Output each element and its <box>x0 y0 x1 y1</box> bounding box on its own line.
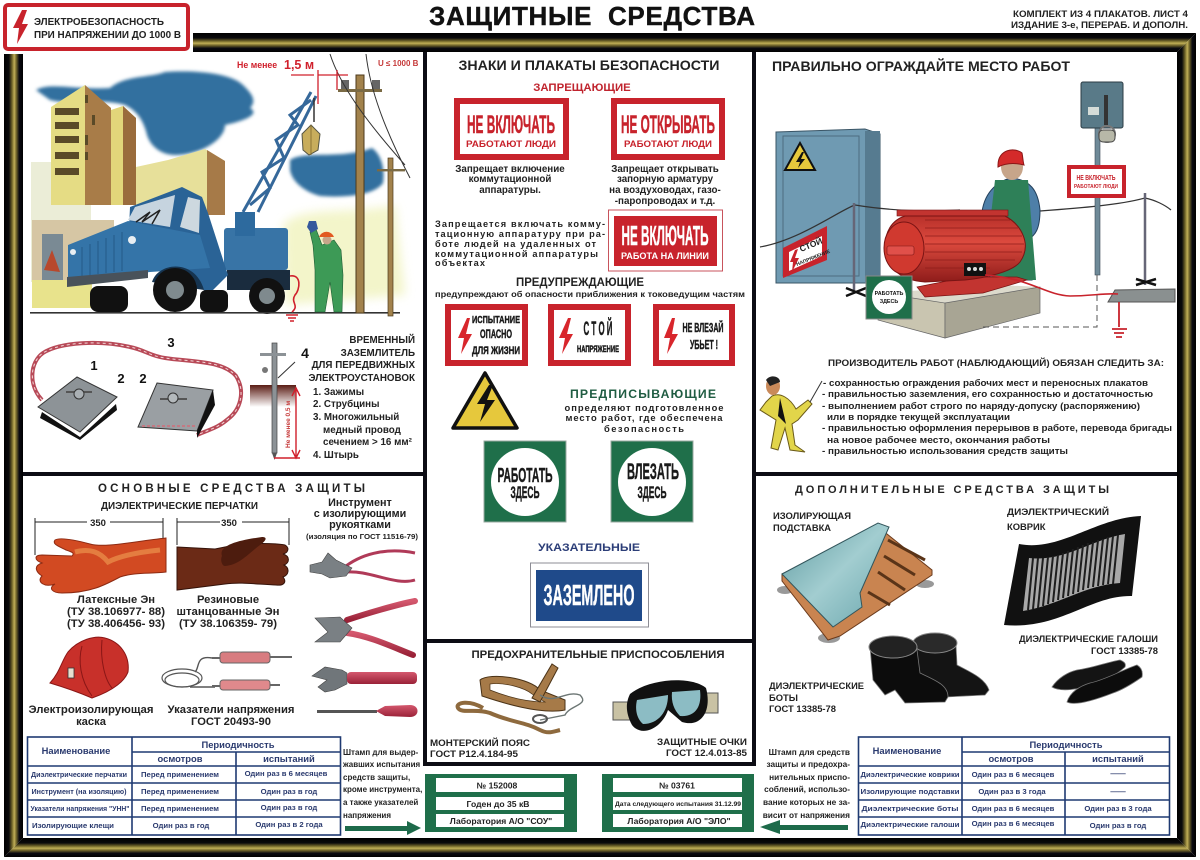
table: main equipment inspection periods: Один раз в год <box>261 787 317 796</box>
sign: stop, voltage on rope: СТОЙ <box>798 235 824 254</box>
note: stamp for tested equipment: жавших испытания <box>342 760 421 769</box>
text: remote site caption: боте людей на удаленных от <box>435 239 596 249</box>
note: stamp for tested equipment: а также указателей <box>343 798 418 807</box>
note: stamp for tested equipment: кроме инструмента, <box>343 785 422 794</box>
table: additional equipment inspection periods: Изолирующие подставки <box>860 787 960 796</box>
illustration: power poles <box>330 54 410 316</box>
caption: voltage indicators <box>168 704 294 728</box>
table: main equipment inspection periods: Один раз в 6 месяцев <box>245 769 328 778</box>
captions: gloves: штанцованные Эн <box>176 606 280 618</box>
list: supervisor duties <box>822 377 1172 456</box>
label: dielectric boots <box>769 680 864 714</box>
note: stamp for voltage independent equipment: соблений, использо- <box>764 784 850 794</box>
captions: gloves: (ТУ 38.106977- 88) <box>67 606 165 618</box>
note: stamp for voltage independent equipment: вание которых не за- <box>763 797 850 807</box>
stamp: green test label 03761: Лаборатория А/О "ЭЛО" <box>627 816 731 826</box>
dimension: minimum distance <box>237 58 419 104</box>
dimension: minimum distance: 1,5 м <box>284 58 314 72</box>
captions: gloves <box>67 594 280 630</box>
sign: test, danger to life: ОПАСНО <box>480 329 512 341</box>
table: additional equipment inspection periods: Один раз в 3 года <box>1084 804 1152 813</box>
illustration: dielectric overshoes <box>1052 660 1142 703</box>
sign: do not switch on, on post: РАБОТАЮТ ЛЮДИ <box>1074 184 1118 190</box>
list: supervisor duties: или в порядке текущей эксплуатации <box>827 411 1010 422</box>
text: do not switch on caption: Запрещает включение <box>455 164 565 175</box>
label: dielectric boots: БОТЫ <box>769 692 798 703</box>
label: dielectric mat: ДИЭЛЕКТРИЧЕСКИЙ <box>1007 506 1109 517</box>
text: do not open caption <box>609 164 721 207</box>
panel: safety signs <box>435 57 745 627</box>
note: stamp for voltage independent equipment: висит от напряжения <box>763 810 850 820</box>
sign: earthed: ЗАЗЕМЛЕНО <box>544 580 634 612</box>
illustration: clouds <box>36 71 384 197</box>
heading: ПРЕДОХРАНИТЕЛЬНЫЕ ПРИСПОСОБЛЕНИЯ <box>472 649 724 661</box>
sign: do not climb: НЕ ВЛЕЗАЙ <box>682 320 724 335</box>
table: additional equipment inspection periods: —— <box>1110 769 1126 778</box>
sign: stop, voltage: НАПРЯЖЕНИЕ <box>577 344 619 354</box>
list: supervisor duties: - сохранностью ограждения рабочих мест и переносных плакатов <box>823 377 1148 388</box>
label: dielectric mat <box>1007 506 1109 532</box>
text: temporary earthing device: ДЛЯ ПЕРЕДВИЖНЫХ <box>312 360 415 371</box>
panel: main protective equipment <box>27 483 422 835</box>
text: temporary earthing device: 2. Струбцины <box>313 399 379 410</box>
table: main equipment inspection periods: Наименование <box>42 745 110 756</box>
label: dielectric boots: ДИЭЛЕКТРИЧЕСКИЕ <box>769 680 864 691</box>
sign: do not open: РАБОТАЮТ ЛЮДИ <box>624 139 712 149</box>
stamp: green test label 03761: Дата следующего испытания 31.12.99 <box>615 801 742 808</box>
text: temporary earthing device: ЭЛЕКТРОУСТАНОВОК <box>308 373 415 384</box>
stamp: green test label 152008: Годен до 35 кВ <box>467 799 529 809</box>
caption: lineman belt <box>430 737 530 759</box>
illustration: crane load <box>302 125 320 155</box>
captions: gloves: (ТУ 38.106359- 79) <box>179 618 277 630</box>
text: do not switch on caption: коммутационной <box>469 174 551 185</box>
panel: safety devices <box>430 649 747 759</box>
sign: do not switch on, line work <box>608 210 722 271</box>
text: do not switch on caption <box>455 164 565 196</box>
illustration: lineman belt <box>458 664 583 732</box>
arrow: to right stamp <box>760 820 848 834</box>
caption: hard hat: Электроизолирующая <box>28 704 154 716</box>
note: stamp for voltage independent equipment: защиты и предохра- <box>767 759 850 769</box>
table: additional equipment inspection periods: Диэлектрические коврики <box>860 770 960 779</box>
sign: do not switch on, on post: НЕ ВКЛЮЧАТЬ <box>1076 175 1116 182</box>
label: insulating stand: ИЗОЛИРУЮЩАЯ <box>773 510 851 521</box>
note: stamp for tested equipment: Штамп для выдер- <box>343 748 419 757</box>
text: remote site caption: объектах <box>435 258 486 268</box>
text: remote site caption <box>435 219 605 268</box>
stamp: green test label 03761 <box>602 774 754 832</box>
heading: insulated tools <box>306 497 418 541</box>
illustration: motor on foundation <box>878 210 1040 338</box>
note: stamp for tested equipment: средств защиты, <box>343 773 410 782</box>
illustration: safety goggles <box>613 680 718 731</box>
list: supervisor duties: - правильностью оформления перерывов в работе, перевода бригады <box>822 422 1172 433</box>
text: mandatory description: определяют подготовленное <box>564 402 724 413</box>
note: stamp for voltage independent equipment: Штамп для средств <box>769 747 850 757</box>
illustration: pliers and tools <box>310 551 418 717</box>
table: additional equipment inspection periods <box>858 737 1170 835</box>
sign: stop, voltage on rope: НАПРЯЖЕНИЕ <box>796 249 832 268</box>
heading: ПРАВИЛЬНО ОГРАЖДАЙТЕ МЕСТО РАБОТ <box>772 57 1070 74</box>
sign: do not switch on: РАБОТАЮТ ЛЮДИ <box>466 139 556 149</box>
note: stamp for tested equipment <box>342 748 422 820</box>
table: additional equipment inspection periods: Диэлектрические галоши <box>860 820 960 829</box>
edition note: ИЗДАНИЕ 3-е, ПЕРЕРАБ. И ДОПОЛН. <box>1011 20 1188 30</box>
illustration: switch box with padlock <box>1081 82 1123 275</box>
sign: stop, voltage: С Т О Й <box>584 318 612 340</box>
edition note: КОМПЛЕКТ ИЗ 4 ПЛАКАТОВ. ЛИСТ 4 <box>1013 9 1189 19</box>
list: supervisor duties: на новое рабочее место, окончания работы <box>827 434 1050 445</box>
sign: work here: РАБОТАТЬ <box>498 465 552 487</box>
illustration: portable earthing clamps: 1 <box>90 358 98 373</box>
note: stamp for voltage independent equipment <box>763 747 850 820</box>
text: temporary earthing device: сечением > 16 мм² <box>323 437 413 448</box>
heading: indicating: УКАЗАТЕЛЬНЫЕ <box>538 542 641 554</box>
illustration: city buildings <box>31 85 405 308</box>
text: mandatory description <box>564 402 724 434</box>
sign: do not climb <box>656 307 732 363</box>
illustration: rubber glove <box>177 537 288 590</box>
sign: do not switch on, line work: РАБОТА НА ЛИНИИ <box>621 251 709 261</box>
table: main equipment inspection periods: Диэлектрические перчатки <box>31 770 127 779</box>
caption: voltage indicators: ГОСТ 20493-90 <box>191 716 271 728</box>
panel: crane near power line <box>30 54 419 461</box>
sign: work here on motor <box>866 276 912 319</box>
heading: dielectric gloves: ДИЭЛЕКТРИЧЕСКИЕ ПЕРЧАТКИ <box>101 501 258 512</box>
panel dividers <box>23 52 1177 766</box>
list: supervisor duties: - правильностью использования средств защиты <box>822 445 1068 456</box>
table: main equipment inspection periods: Один раз в 2 года <box>255 820 323 829</box>
text: remote site caption: тационную аппаратуру при ра- <box>435 229 605 239</box>
text: remote site caption: Запрещается включать комму- <box>435 219 605 229</box>
table: additional equipment inspection periods: Один раз в 6 месяцев <box>972 819 1055 828</box>
text: remote site caption: коммутационной аппаратуры <box>435 249 598 259</box>
caption: safety goggles: ГОСТ 12.4.013-85 <box>666 747 747 758</box>
table: main equipment inspection periods: Перед применением <box>141 804 219 813</box>
table: main equipment inspection periods: Один раз в год <box>261 803 317 812</box>
table: main equipment inspection periods: Один раз в год <box>153 821 209 830</box>
badge: electrical safety <box>5 5 188 49</box>
stamp: green test label 152008 <box>425 774 577 832</box>
text: temporary earthing device: 4. Штырь <box>313 450 359 461</box>
illustration: earth pin <box>250 343 309 460</box>
illustration: hard hat <box>50 637 128 698</box>
sign: do not open: НЕ ОТКРЫВАТЬ <box>621 111 715 139</box>
sign: work here: ЗДЕСЬ <box>510 483 540 502</box>
table: additional equipment inspection periods: Наименование <box>873 745 941 756</box>
list: supervisor duties: - правильностью заземления, его сохранностью и достаточностью <box>822 388 1153 399</box>
stamp: green test label 03761: № 03761 <box>659 780 695 790</box>
badge: electrical safety: ЭЛЕКТРОБЕЗОПАСНОСТЬ <box>34 17 164 28</box>
icon: high voltage triangle <box>453 373 517 428</box>
sign: stop, voltage <box>551 307 628 363</box>
sign: do not switch on, on post <box>1069 167 1124 196</box>
illustration: fence posts and rope <box>760 193 1171 296</box>
text: temporary earthing device: 1. Зажимы <box>313 387 364 398</box>
caption: lineman belt: МОНТЕРСКИЙ ПОЯС <box>430 737 530 748</box>
text: temporary earthing device <box>308 334 415 461</box>
captions: gloves: Резиновые <box>197 594 259 606</box>
text: mandatory description: безопасность <box>604 423 684 434</box>
label: dielectric overshoes <box>1019 633 1158 656</box>
captions: gloves: (ТУ 38.406456- 93) <box>67 618 165 630</box>
dimension: minimum distance: U ≤ 1000 В <box>378 59 419 68</box>
illustration: latex glove <box>36 538 166 593</box>
text: do not switch on caption: аппаратуры. <box>479 185 541 196</box>
illustration: voltage indicators <box>162 652 292 690</box>
table: additional equipment inspection periods: Периодичность <box>1029 739 1103 750</box>
illustration: supervisor pointing <box>760 376 822 452</box>
stamp: green test label 152008: № 152008 <box>477 780 518 790</box>
sign: stop, voltage on rope <box>783 226 832 278</box>
label: dielectric overshoes: ГОСТ 13385-78 <box>1091 645 1158 656</box>
sign: earthed <box>530 563 648 627</box>
text: temporary earthing device: 3. Многожильный <box>313 412 399 423</box>
note: stamp for voltage independent equipment: нительных приспо- <box>769 772 850 782</box>
list: supervisor duties: - выполнением работ строго по наряду-допуску (распоряжению) <box>822 400 1140 411</box>
illustration: truck <box>30 187 400 314</box>
caption: hard hat <box>28 704 154 728</box>
table: main equipment inspection periods: Периодичность <box>201 739 275 750</box>
panel: safety signs: НЕ ВКЛЮЧАТЬ <box>622 220 708 251</box>
panel: fence off the workplace <box>760 57 1175 456</box>
table: main equipment inspection periods: осмотров <box>158 753 203 764</box>
text: mandatory description: место работ, где обеспечена <box>566 412 723 423</box>
table: main equipment inspection periods: Инструмент (на изоляцию) <box>32 787 127 796</box>
dimension: minimum distance: Не менее <box>237 60 277 70</box>
text: do not open caption: -паропроводах и т.д. <box>615 196 715 207</box>
table: main equipment inspection periods <box>27 737 341 835</box>
table: additional equipment inspection periods: осмотров <box>989 753 1034 764</box>
heading: warning: ПРЕДУПРЕЖДАЮЩИЕ <box>516 275 644 289</box>
arrow: to left stamp <box>345 821 421 835</box>
table: main equipment inspection periods: испытаний <box>263 753 315 764</box>
table: additional equipment inspection periods: Один раз в 6 месяцев <box>972 770 1055 779</box>
sign: test, danger to life: ДЛЯ ЖИЗНИ <box>472 345 520 357</box>
label: dielectric boots: ГОСТ 13385-78 <box>769 703 836 714</box>
stamp: green test label 152008: Лаборатория А/О "СОУ" <box>450 816 552 826</box>
table: additional equipment inspection periods: Один раз в 3 года <box>978 787 1046 796</box>
table: main equipment inspection periods: Перед применением <box>141 787 219 796</box>
text: temporary earthing device: ВРЕМЕННЫЙ <box>349 334 415 346</box>
table: main equipment inspection periods: Перед применением <box>141 770 219 779</box>
heading: ДОПОЛНИТЕЛЬНЫЕ СРЕДСТВА ЗАЩИТЫ <box>795 484 1109 496</box>
text: warning description: предупреждают об опасности приближения к токоведущим частям <box>435 289 745 299</box>
sign: climb here: ВЛЕЗАТЬ <box>627 459 679 484</box>
heading: insulated tools: (изоляция по ГОСТ 11516-79) <box>306 532 418 541</box>
illustration: portable earthing clamps: 3 <box>167 335 175 350</box>
illustration: worker in apron <box>982 150 1040 280</box>
illustration: earth bus and wire <box>980 275 1175 337</box>
illustration: portable earthing clamps: 2 <box>117 371 125 386</box>
heading: insulated tools: рукоятками <box>329 519 391 531</box>
label: dielectric overshoes: ДИЭЛЕКТРИЧЕСКИЕ ГАЛОШИ <box>1019 633 1158 644</box>
illustration: signalling worker <box>307 221 343 312</box>
illustration: crane boom <box>243 92 316 212</box>
label: insulating stand <box>773 510 851 533</box>
table: main equipment inspection periods: Изолирующие клещи <box>32 821 114 830</box>
caption: hard hat: каска <box>76 716 107 728</box>
sign: do not switch on: НЕ ВКЛЮЧАТЬ <box>467 111 555 139</box>
text: do not open caption: запорную арматуру <box>617 174 714 185</box>
heading: insulated tools: Инструмент <box>328 497 392 509</box>
table: additional equipment inspection periods: Один раз в 6 месяцев <box>972 804 1055 813</box>
icon: truck earth wire <box>286 276 299 321</box>
illustration: earth pin: 4 <box>301 345 309 361</box>
table: additional equipment inspection periods: Один раз в год <box>1090 821 1146 830</box>
note: stamp for tested equipment: напряжения <box>343 811 391 820</box>
sign: do not switch on <box>457 101 566 157</box>
illustration: earth pin: Не менее 0,5 м <box>285 401 292 448</box>
label: dielectric mat: КОВРИК <box>1007 521 1046 532</box>
sign: work here on motor: ЗДЕСЬ <box>880 299 898 305</box>
text: temporary earthing device: ЗАЗЕМЛИТЕЛЬ <box>341 348 415 359</box>
table: main equipment inspection periods: Указатели напряжения "УНН" <box>30 804 130 813</box>
heading: ЗНАКИ И ПЛАКАТЫ БЕЗОПАСНОСТИ <box>458 57 720 73</box>
captions: gloves: Латексные Эн <box>77 594 155 606</box>
table: additional equipment inspection periods: Диэлектрические боты <box>862 804 959 813</box>
illustration: dielectric boots <box>869 633 989 703</box>
dimension: glove lengths: 350 <box>90 518 106 529</box>
illustration: portable earthing clamps <box>32 335 241 440</box>
caption: safety goggles <box>657 736 747 758</box>
heading: insulated tools: с изолирующими <box>314 508 406 520</box>
table: additional equipment inspection periods: испытаний <box>1092 753 1144 764</box>
sign: do not open <box>614 101 722 157</box>
table: additional equipment inspection periods: —— <box>1110 787 1126 796</box>
text: do not open caption: на воздуховодах, газо- <box>609 185 721 196</box>
illustration: insulating stand <box>777 523 934 643</box>
text: temporary earthing device: медный провод <box>323 425 402 436</box>
sign: work here on motor: РАБОТАТЬ <box>875 291 904 297</box>
dimension: glove lengths: 350 <box>221 518 237 529</box>
illustration: electrical cabinet <box>776 129 880 283</box>
text: do not open caption: Запрещает открывать <box>611 164 719 175</box>
panel: additional protective equipment <box>760 484 1170 835</box>
caption: safety goggles: ЗАЩИТНЫЕ ОЧКИ <box>657 736 747 747</box>
caption: lineman belt: ГОСТ Р12.4.184-95 <box>430 748 518 759</box>
badge: electrical safety: ПРИ НАПРЯЖЕНИИ ДО 1000 В <box>34 30 181 41</box>
heading: supervisor duties: ПРОИЗВОДИТЕЛЬ РАБОТ (НАБЛЮДАЮЩИЙ) ОБЯЗАН СЛЕДИТЬ ЗА: <box>828 357 1164 369</box>
heading: mandatory: ПРЕДПИСЫВАЮЩИЕ <box>570 387 716 401</box>
heading: ОСНОВНЫЕ СРЕДСТВА ЗАЩИТЫ <box>98 483 365 495</box>
label: insulating stand: ПОДСТАВКА <box>773 522 831 533</box>
illustration: portable earthing clamps: 2 <box>139 371 147 386</box>
sign: test, danger to life: ИСПЫТАНИЕ <box>472 314 520 326</box>
sign: climb here: ЗДЕСЬ <box>638 483 666 502</box>
edition note <box>1011 9 1189 30</box>
sign: work here <box>484 441 566 522</box>
caption: voltage indicators: Указатели напряжения <box>168 704 294 716</box>
heading: prohibiting: ЗАПРЕЩАЮЩИЕ <box>533 82 631 94</box>
sign: do not climb: УБЬЕТ ! <box>690 337 718 352</box>
sign: test, danger to life <box>448 307 525 363</box>
dimension: glove lengths <box>35 518 289 555</box>
sign: climb here <box>611 441 693 522</box>
illustration: dielectric mat <box>1004 516 1141 625</box>
title: ЗАЩИТНЫЕ СРЕДСТВА <box>429 1 755 31</box>
